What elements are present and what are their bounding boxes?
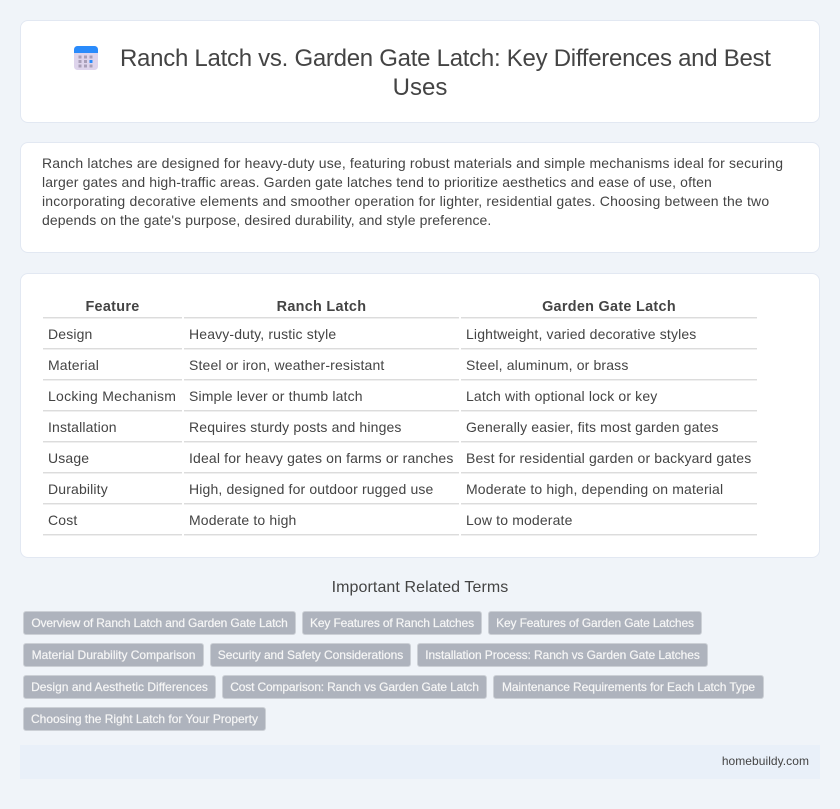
comparison table: Locking Mechanism bbox=[48, 388, 176, 404]
title bbox=[120, 45, 771, 101]
comparison table: Material bbox=[48, 357, 99, 373]
related term tags: Overview of Ranch Latch and Garden Gate Latch bbox=[31, 616, 288, 630]
comparison table: Low to moderate bbox=[466, 512, 573, 528]
related term tags: Key Features of Ranch Latches bbox=[310, 616, 474, 630]
related term tags: Choosing the Right Latch for Your Property bbox=[31, 712, 258, 726]
comparison table: Garden Gate Latch bbox=[542, 299, 676, 315]
intro panel bbox=[20, 142, 820, 253]
comparison table: Heavy-duty, rustic style bbox=[189, 326, 336, 342]
comparison table: Ranch Latch bbox=[277, 299, 366, 315]
comparison table: Durability bbox=[48, 481, 108, 497]
related term tags: Installation Process: Ranch vs Garden Gate Latches bbox=[425, 648, 700, 662]
comparison table: Lightweight, varied decorative styles bbox=[466, 326, 696, 342]
comparison table: Best for residential garden or backyard gates bbox=[466, 450, 751, 466]
icon: calendar bbox=[74, 46, 98, 70]
comparison table bbox=[43, 299, 757, 536]
comparison table: Ideal for heavy gates on farms or ranches bbox=[189, 450, 454, 466]
table panel bbox=[20, 273, 820, 558]
related term tags bbox=[23, 611, 764, 731]
related term tags: Cost Comparison: Ranch vs Garden Gate Latch bbox=[230, 680, 479, 694]
comparison table: Steel, aluminum, or brass bbox=[466, 357, 628, 373]
header panel bbox=[20, 20, 820, 123]
comparison table: Moderate to high bbox=[189, 512, 296, 528]
intro text: depends on the gate's purpose, desired durability, and style preference. bbox=[42, 212, 491, 228]
comparison table: Latch with optional lock or key bbox=[466, 388, 657, 404]
comparison table: Design bbox=[48, 326, 92, 342]
title: Uses bbox=[393, 74, 447, 101]
comparison table: Usage bbox=[48, 450, 89, 466]
comparison table: High, designed for outdoor rugged use bbox=[189, 481, 434, 497]
related term tags: Key Features of Garden Gate Latches bbox=[496, 616, 694, 630]
intro text: Ranch latches are designed for heavy-duty use, featuring robust materials and simple mechanisms ideal for securing bbox=[42, 155, 783, 171]
comparison table: Installation bbox=[48, 419, 117, 435]
comparison table: Steel or iron, weather-resistant bbox=[189, 357, 384, 373]
related term tags: Material Durability Comparison bbox=[32, 648, 195, 662]
comparison table: Feature bbox=[85, 299, 140, 315]
comparison table: Simple lever or thumb latch bbox=[189, 388, 363, 404]
comparison table: Generally easier, fits most garden gates bbox=[466, 419, 719, 435]
footer source text: homebuildy.com bbox=[722, 754, 809, 768]
comparison table: Requires sturdy posts and hinges bbox=[189, 419, 402, 435]
intro text: incorporating decorative elements and smoother operation for lighter, residential gates. Choosing between the two bbox=[42, 193, 769, 209]
title: Ranch Latch vs. Garden Gate Latch: Key Differences and Best bbox=[120, 45, 771, 72]
related term tags: Design and Aesthetic Differences bbox=[31, 680, 208, 694]
intro text bbox=[42, 155, 783, 228]
comparison table: Cost bbox=[48, 512, 77, 528]
footer bar bbox=[20, 745, 820, 779]
related terms heading: Important Related Terms bbox=[332, 579, 508, 596]
related term tags: Security and Safety Considerations bbox=[218, 648, 403, 662]
related term tags: Maintenance Requirements for Each Latch Type bbox=[502, 680, 755, 694]
comparison table: Moderate to high, depending on material bbox=[466, 481, 723, 497]
intro text: larger gates and high-traffic areas. Garden gate latches tend to prioritize aesthetics and ease of use, often bbox=[42, 174, 712, 190]
